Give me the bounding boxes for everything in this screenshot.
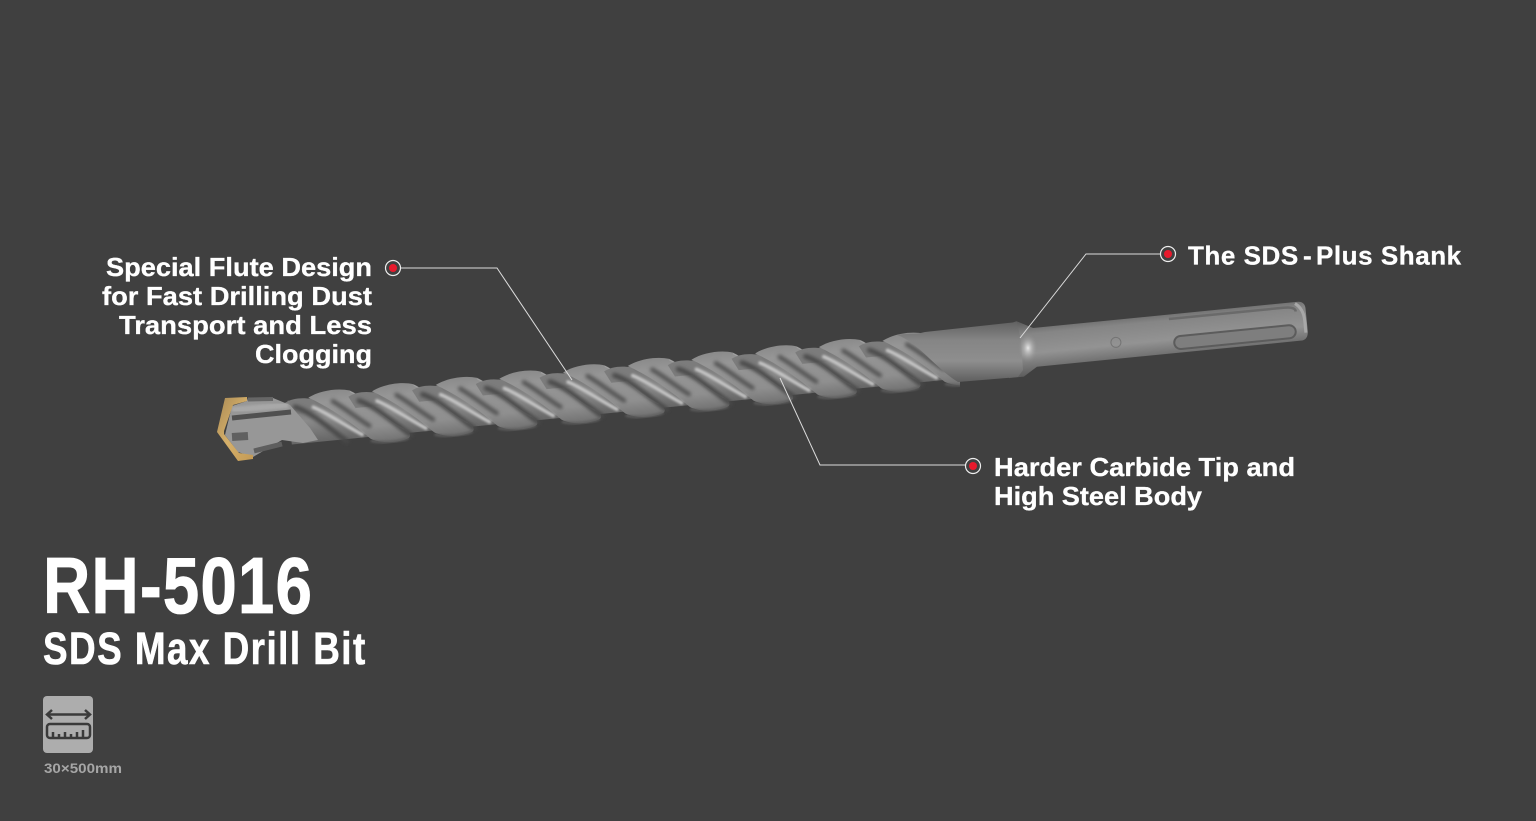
leader line: carbide bbox=[780, 378, 966, 465]
text: shank: The SDS bbox=[1188, 240, 1299, 270]
text: flute: for Fast Drilling Dust bbox=[102, 281, 372, 311]
title: model number: RH-5016 bbox=[43, 541, 312, 630]
callout: sds-plus shank bbox=[1020, 240, 1462, 338]
leader line: flute bbox=[400, 268, 572, 380]
spiral flutes bbox=[285, 332, 960, 444]
drill bit bbox=[217, 293, 1309, 461]
text: flute: Special Flute Design bbox=[106, 252, 372, 282]
text: flute: Transport and Less bbox=[119, 310, 372, 340]
marker: shank bbox=[1160, 246, 1176, 262]
text: carbide: Harder Carbide Tip and bbox=[994, 452, 1295, 482]
leader line: shank bbox=[1020, 254, 1160, 338]
marker: flute bbox=[386, 260, 400, 276]
marker: carbide bbox=[966, 458, 980, 474]
text: carbide bbox=[994, 452, 1295, 511]
text: flute: Clogging bbox=[255, 339, 372, 369]
text: shank: - bbox=[1303, 240, 1312, 270]
shank bbox=[1003, 293, 1309, 378]
callout: carbide tip bbox=[780, 378, 1295, 511]
collar bbox=[897, 322, 1038, 382]
callout: special flute design bbox=[102, 252, 572, 380]
icon: dimension ruler bbox=[43, 696, 93, 753]
subtitle: SDS Max Drill Bit bbox=[43, 624, 366, 674]
dimension label: 30×500mm bbox=[44, 760, 122, 776]
text: flute bbox=[102, 252, 372, 369]
carbide tip and head bbox=[217, 397, 318, 461]
text: carbide: High Steel Body bbox=[994, 481, 1203, 511]
text: shank: Plus Shank bbox=[1316, 240, 1462, 270]
